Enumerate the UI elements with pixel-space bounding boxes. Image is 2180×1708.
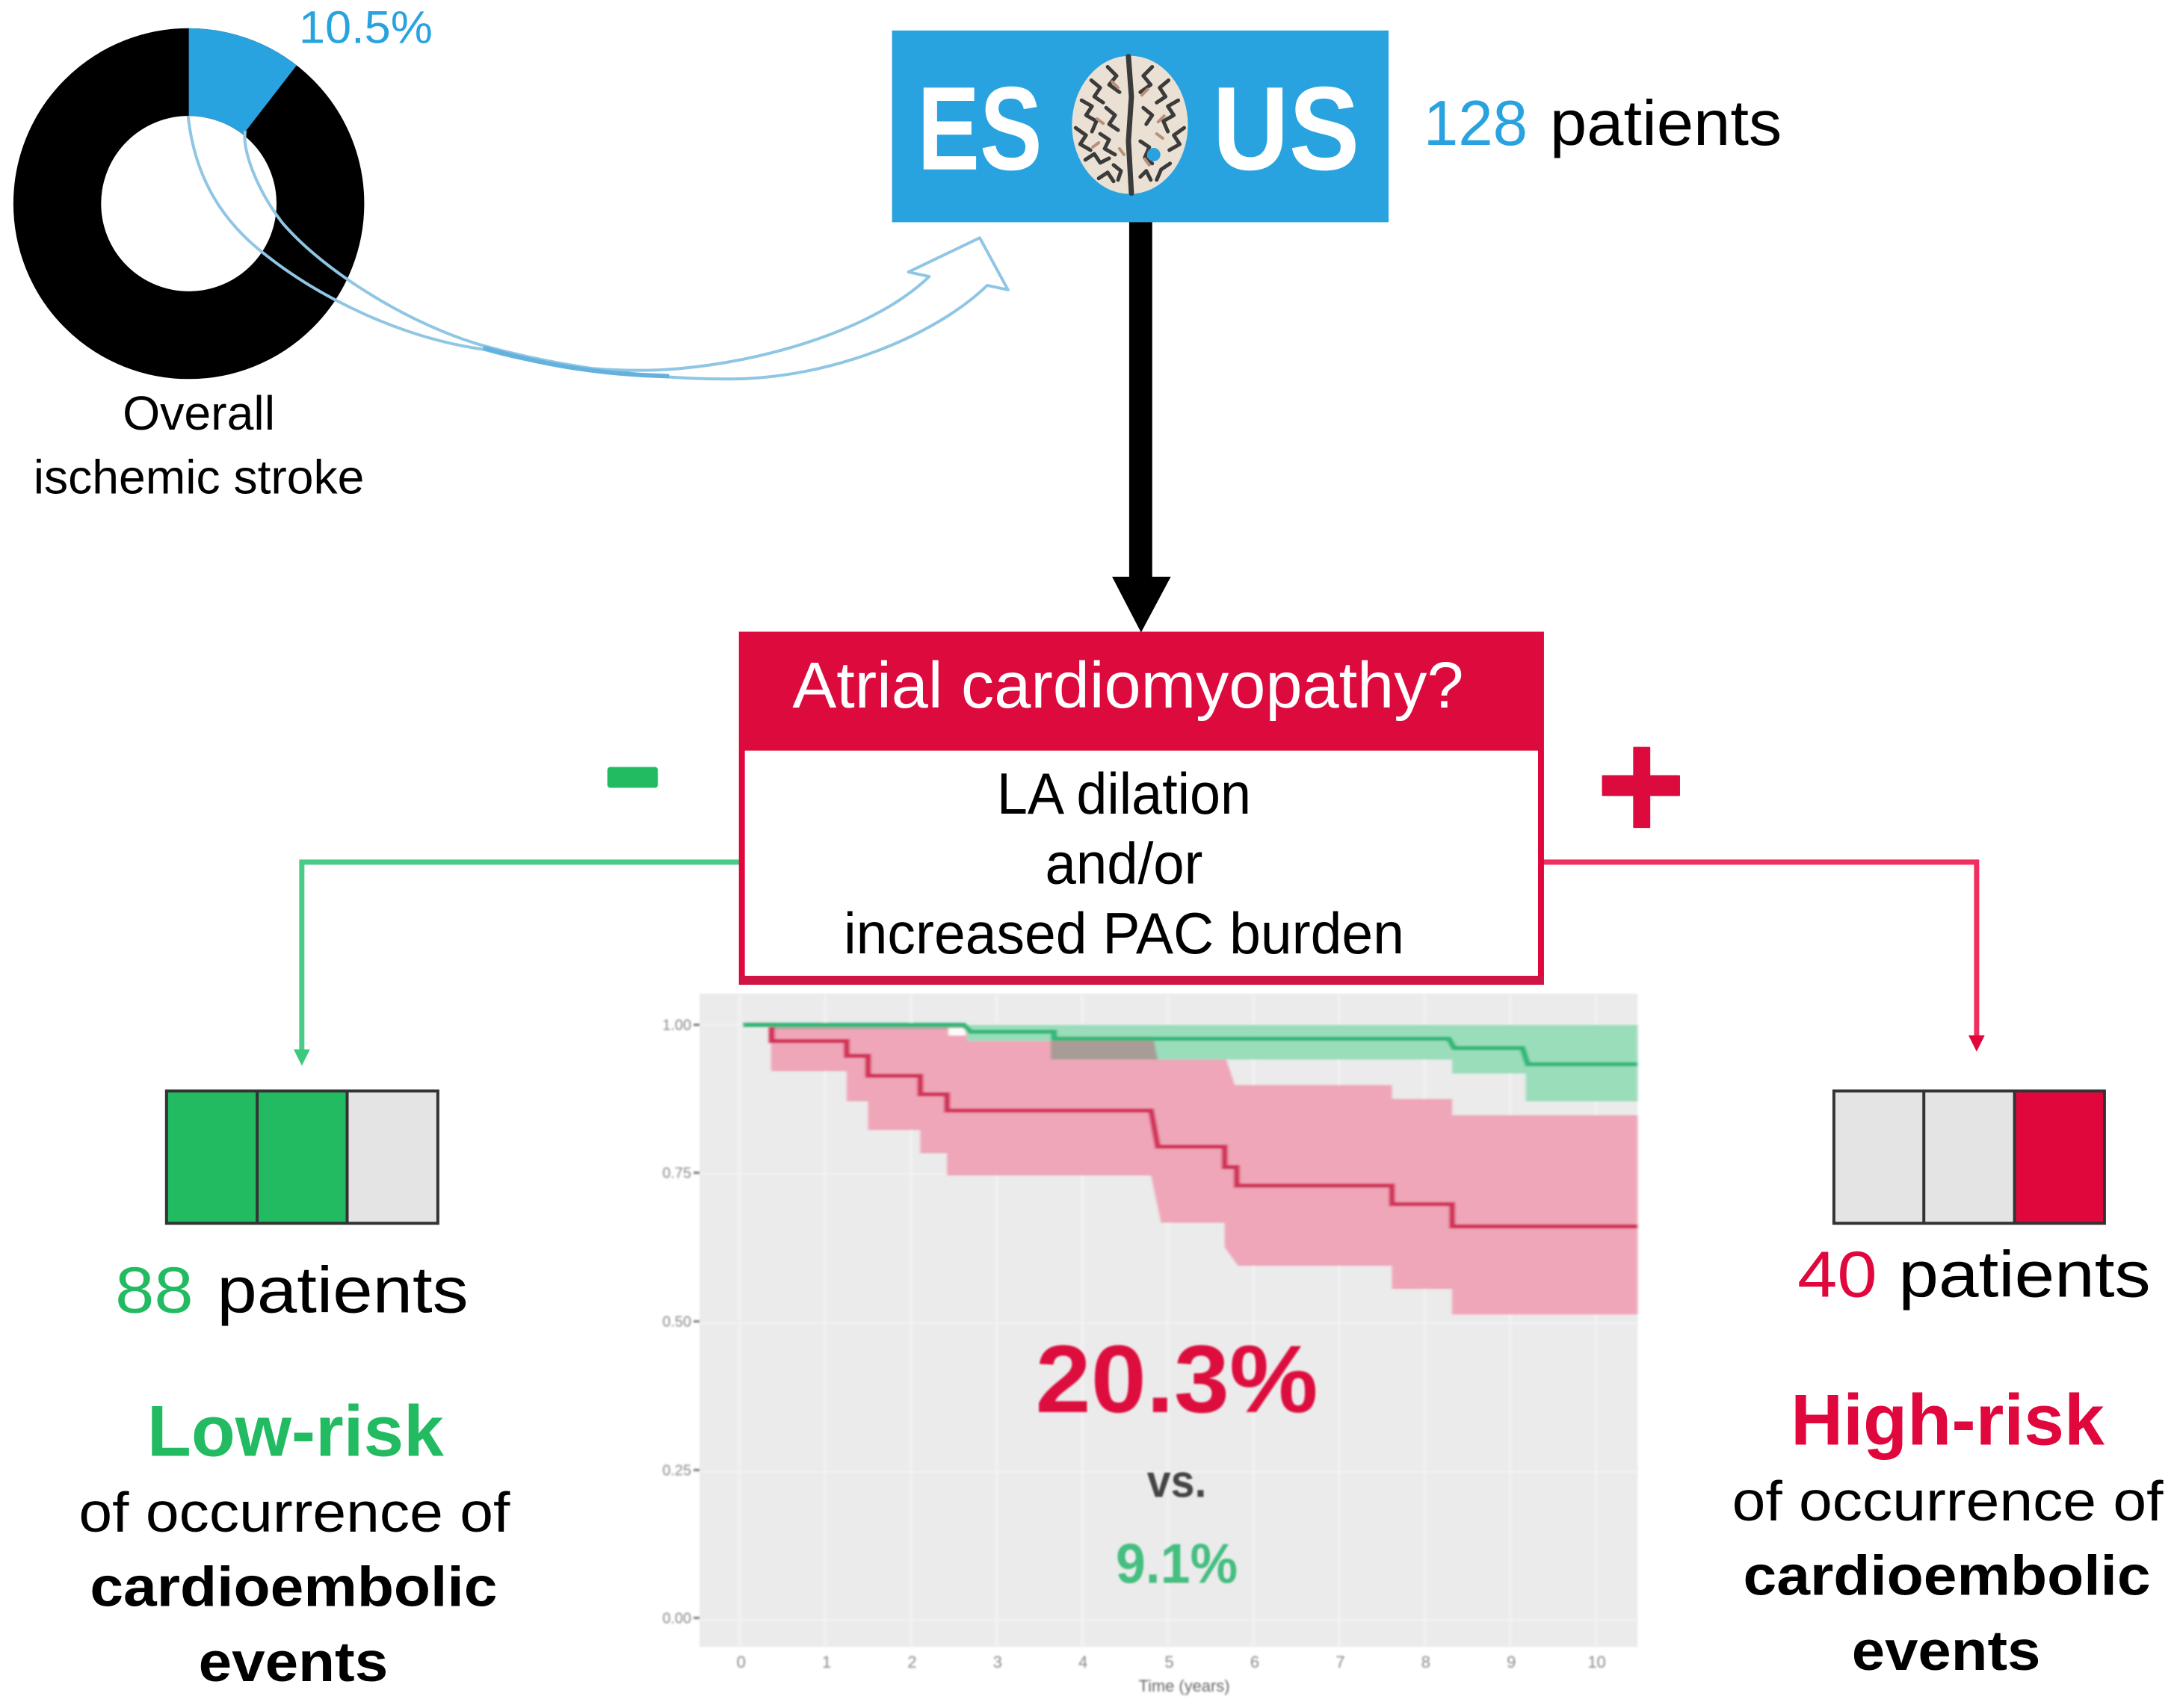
- y axis ticks: [694, 1025, 700, 1618]
- text block: high-risk: [1732, 1381, 2164, 1683]
- text block: low-risk: Low-risk: [147, 1392, 444, 1472]
- criteria text: and/or: [1046, 832, 1202, 897]
- x axis labels: 4: [1078, 1653, 1087, 1671]
- plot area: [700, 994, 1637, 1647]
- text block: low-risk: [78, 1392, 510, 1694]
- arrow: curved outline from donut to ESUS box: [188, 116, 1008, 379]
- red survival curve: [743, 1025, 1637, 1226]
- x axis labels: 8: [1421, 1653, 1430, 1671]
- y axis labels: 0.50: [662, 1314, 691, 1331]
- y axis labels: 0.75: [662, 1166, 691, 1182]
- criteria text: increased PAC burden: [844, 902, 1404, 966]
- pictogram: low-risk 2 of 3: [167, 1091, 438, 1223]
- text: 128 patients: [1424, 88, 1782, 159]
- heading: Atrial cardiomyopathy?: Atrial cardiomyopathy?: [792, 649, 1464, 722]
- x axis labels: Time (years): [1139, 1677, 1229, 1695]
- text: 88 patients: 88: [115, 1254, 194, 1327]
- icon: plus sign: [1603, 748, 1679, 827]
- value: 20.3%: 20.3%: [1036, 1326, 1318, 1433]
- criteria text: [844, 762, 1404, 966]
- red confidence band: [771, 1028, 1637, 1314]
- x axis labels: 7: [1336, 1653, 1344, 1671]
- connector: red branch to high-risk group: [1543, 862, 1985, 1051]
- text block: high-risk: events: [1852, 1620, 2040, 1683]
- y axis labels: 0.00: [662, 1610, 691, 1627]
- x axis labels: 2: [907, 1653, 917, 1671]
- text block: low-risk: cardioembolic: [90, 1556, 497, 1619]
- donut segment: 10.5% ESUS: [189, 28, 297, 134]
- x axis labels: 10: [1587, 1653, 1606, 1671]
- text block: high-risk: cardioembolic: [1744, 1545, 2151, 1608]
- text block: high-risk: High-risk: [1791, 1381, 2105, 1461]
- label: 10.5%: 10.5%: [299, 2, 433, 54]
- text block: low-risk: of occurrence of: [78, 1482, 510, 1544]
- text: 40 patients: [1797, 1238, 2151, 1311]
- Kaplan-Meier chart: [662, 994, 1637, 1695]
- text: US: US: [1212, 62, 1359, 195]
- text: 128 patients: 128: [1424, 88, 1528, 159]
- x axis labels: 9: [1507, 1653, 1516, 1671]
- connector: green branch to low-risk group: [294, 862, 740, 1065]
- text: 88 patients: patients: [217, 1254, 469, 1327]
- x axis labels: [737, 1653, 1606, 1695]
- text: 128 patients: patients: [1550, 88, 1782, 159]
- y axis labels: [662, 1018, 691, 1627]
- text: 40 patients: 40: [1797, 1238, 1877, 1311]
- criteria text: LA dilation: [997, 762, 1251, 826]
- x axis labels: 3: [993, 1653, 1002, 1671]
- text: vs.: vs.: [1147, 1455, 1206, 1507]
- donut chart: overall ischemic stroke: [58, 28, 321, 335]
- y axis labels: 1.00: [662, 1018, 691, 1034]
- caption: overall ischemic stroke: ischemic stroke: [34, 451, 364, 504]
- caption: overall ischemic stroke: [34, 387, 364, 504]
- green confidence band: [773, 1025, 1637, 1101]
- x axis labels: 5: [1165, 1653, 1174, 1671]
- text: 40 patients: patients: [1898, 1238, 2151, 1311]
- x axis labels: 1: [822, 1653, 831, 1671]
- text block: low-risk: events: [199, 1631, 388, 1694]
- white gap: [948, 1028, 966, 1036]
- pictogram: high-risk 1 of 3: [1834, 1091, 2105, 1223]
- text block: high-risk: of occurrence of: [1732, 1470, 2164, 1533]
- header band: [740, 632, 1543, 751]
- y axis labels: 0.25: [662, 1462, 691, 1479]
- x axis labels: 6: [1250, 1653, 1259, 1671]
- atrial cardiomyopathy box: [740, 632, 1543, 985]
- bottom edge: [740, 976, 1543, 985]
- band overlap: [1051, 1036, 1158, 1059]
- icon: minus sign: [608, 767, 658, 788]
- arrow: black arrow from ESUS to atrial cardiomyopathy: [1112, 222, 1171, 632]
- icon: brain: [1072, 56, 1188, 194]
- green survival curve: [743, 1025, 1637, 1064]
- text: 88 patients: [115, 1254, 469, 1327]
- x axis labels: 0: [737, 1653, 746, 1671]
- value: 9.1%: 9.1%: [1116, 1533, 1238, 1596]
- text: ES: ES: [917, 62, 1043, 195]
- caption: overall ischemic stroke: Overall: [123, 387, 275, 440]
- ESUS box: [892, 31, 1389, 222]
